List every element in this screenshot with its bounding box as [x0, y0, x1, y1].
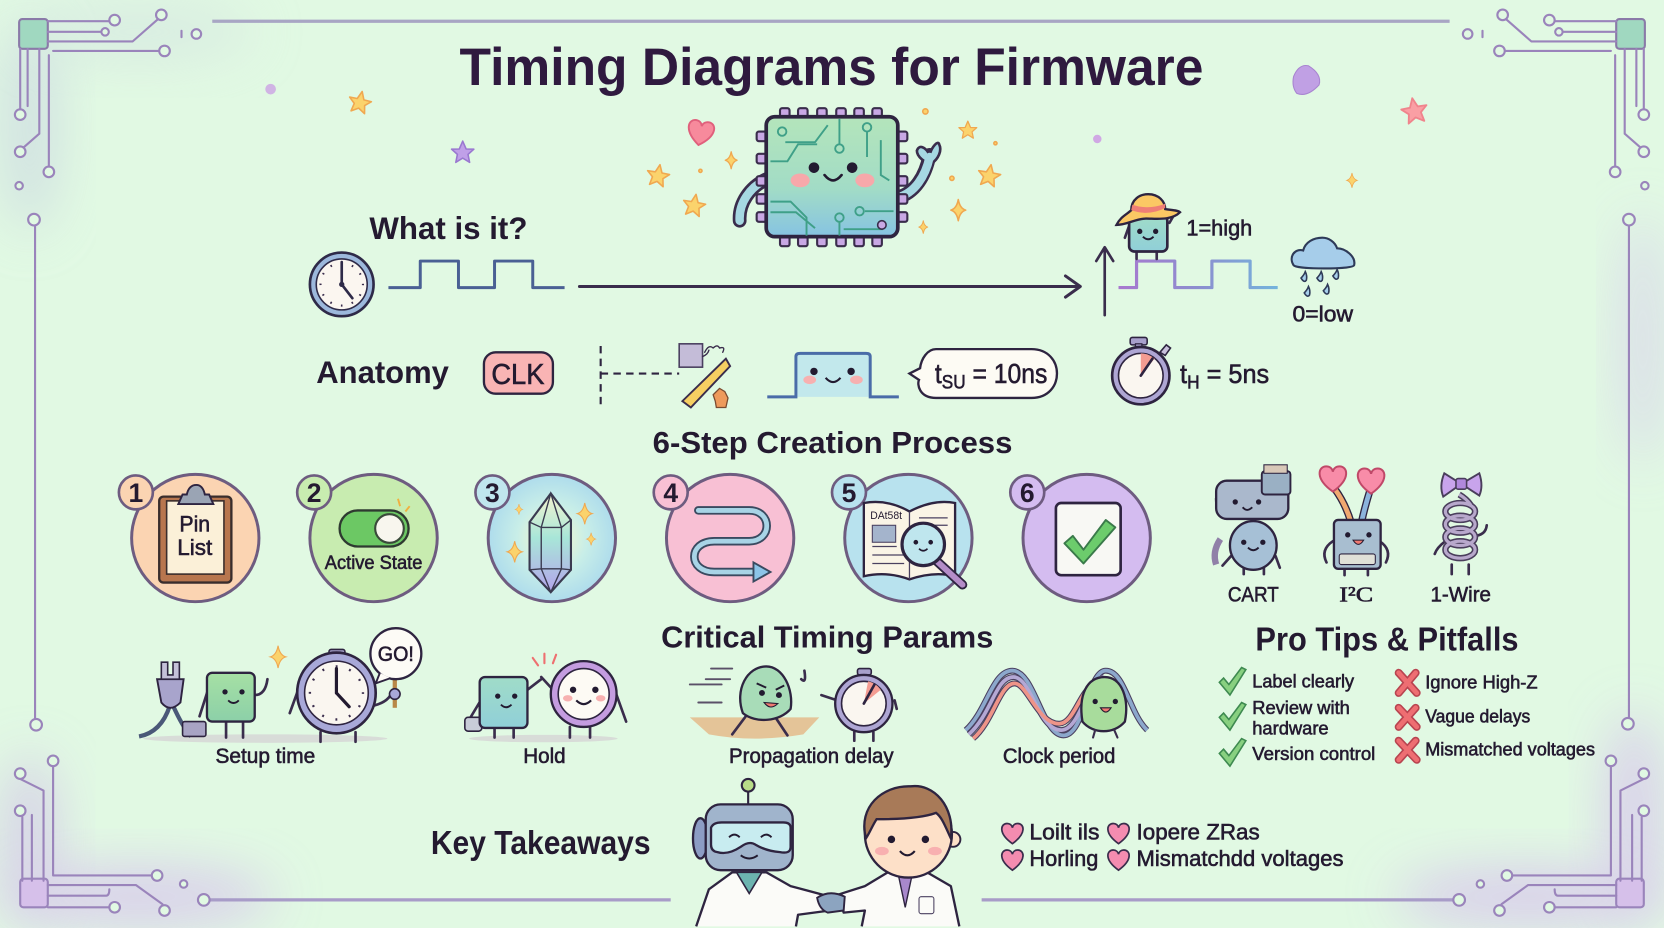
chip body: [766, 117, 898, 237]
section: what is it: [310, 194, 1354, 327]
sparkles: [645, 109, 1002, 233]
label: 1=high: 1=high: [1186, 216, 1252, 241]
step 5: datasheet magnifier: [832, 474, 972, 602]
label: Propagation delay: [729, 745, 894, 768]
robot in lab coat: [693, 779, 830, 926]
label: hold time: H: [1187, 372, 1200, 392]
pitfalls list: Ignore High-Z: [1425, 672, 1538, 693]
GO clock: [290, 690, 391, 742]
tips list: Label clearly: [1252, 671, 1355, 692]
label: I²C: [1339, 583, 1373, 607]
takeaways list: Mismatchdd voltages: [1137, 846, 1343, 871]
step 6: checklist: [1010, 474, 1150, 602]
step 1: pin list: 1: [128, 478, 143, 508]
step 3: crystal: [475, 474, 616, 602]
long arrow: [579, 276, 1080, 297]
tips list: Review with: [1252, 697, 1350, 718]
handshake: [817, 893, 845, 913]
decorative confetti: [265, 65, 1429, 188]
param: setup time: GO!: [378, 643, 414, 666]
up axis arrow: [1096, 247, 1113, 315]
heading: critical timing params: Critical Timing Params: [661, 619, 993, 654]
step 6: checklist: 6: [1020, 478, 1035, 508]
param: hold: [465, 654, 626, 768]
circuit traces: [770, 119, 894, 236]
step 5: datasheet magnifier: 5: [842, 478, 857, 508]
tips list: hardware: [1252, 717, 1329, 738]
panel: key takeaways: [431, 779, 1343, 926]
step 5: datasheet magnifier: DAt58t: [870, 510, 902, 522]
takeaways list: Loilt ils: [1029, 819, 1099, 844]
pitfalls list: [1399, 672, 1595, 760]
pitfalls list: Vague delays: [1425, 706, 1530, 727]
panel: pro tips and pitfalls: [1219, 621, 1595, 766]
section: anatomy: [316, 337, 1269, 407]
panel: six steps: [119, 474, 1150, 602]
pitfalls list: Mismatched voltages: [1425, 739, 1595, 760]
character: chip with sun hat, 1=high: [1116, 194, 1180, 259]
arms: [740, 178, 768, 221]
param: clock period: [966, 671, 1147, 768]
label: hold time: t: [1180, 359, 1187, 389]
panel: protocol characters: [1215, 465, 1491, 607]
protocol: 1-Wire: [1431, 473, 1491, 607]
protocol: CART: [1215, 465, 1290, 607]
mascot: chip character with sparkles: [645, 108, 1002, 246]
pulse character: [767, 353, 899, 397]
icon: rain cloud: [1292, 238, 1354, 296]
speech bubble: setup time: = 10ns: [966, 358, 1047, 389]
green chip: [200, 679, 267, 738]
logic waveform: [1119, 261, 1278, 288]
step 1: pin list: [119, 474, 259, 602]
step 4: serpentine arrow: [654, 474, 794, 602]
pins: [757, 108, 907, 246]
icon: ruler and tools: [679, 344, 730, 407]
power plug: [139, 706, 191, 736]
takeaways list: [1002, 819, 1343, 871]
stopwatch: [821, 695, 897, 741]
step 2: active state: [297, 474, 437, 602]
CLK pill: CLK: [491, 359, 544, 391]
panel: timing params: [139, 628, 1147, 768]
heading: 6-step process: 6-Step Creation Process: [653, 425, 1012, 460]
speech bubble: setup time: SU: [942, 372, 966, 393]
heading: Pro Tips & Pitfalls: [1255, 621, 1519, 658]
heading: Anatomy: [316, 354, 449, 390]
label: hold time: = 5ns: [1200, 359, 1269, 389]
icon: stopwatch: [1112, 337, 1171, 404]
clock waveform: [388, 261, 565, 288]
protocol: I2C: [1320, 466, 1388, 607]
heart: [686, 119, 715, 147]
label: Clock period: [1003, 745, 1115, 768]
step 3: crystal: 3: [485, 478, 500, 508]
label: Hold: [523, 745, 566, 768]
speech bubble: setup time: [909, 349, 1057, 398]
icon: wall clock: [310, 253, 374, 316]
step 2: active state: Active State: [325, 553, 422, 574]
scientist in lab coat: [817, 786, 960, 926]
label: 1-Wire: [1431, 584, 1491, 607]
takeaways list: Iopere ZRas: [1137, 819, 1260, 844]
chip face: [809, 162, 819, 173]
param: propagation delay: [690, 666, 897, 768]
step 4: serpentine arrow: 4: [663, 478, 678, 508]
sparkle: [270, 646, 286, 668]
speech bubble: setup time: t: [935, 358, 943, 389]
step 1: pin list: List: [177, 535, 213, 560]
label: CART: [1228, 584, 1279, 607]
title: Timing Diagrams for Firmware: [460, 38, 1203, 97]
tips list: [1219, 667, 1375, 766]
param: setup time: [139, 628, 421, 768]
step 2: active state: 2: [307, 478, 322, 508]
takeaways list: Horling: [1029, 846, 1098, 871]
heading: Key Takeaways: [431, 824, 651, 861]
step 1: pin list: Pin: [179, 512, 210, 537]
tips list: Version control: [1252, 743, 1375, 764]
heading: What is it?: [369, 210, 527, 246]
GO sign: [393, 679, 397, 708]
CLK pill: [484, 352, 553, 394]
label: Setup time: [215, 745, 315, 768]
dashed markers: [601, 346, 679, 405]
label: 0=low: 0=low: [1293, 302, 1354, 327]
